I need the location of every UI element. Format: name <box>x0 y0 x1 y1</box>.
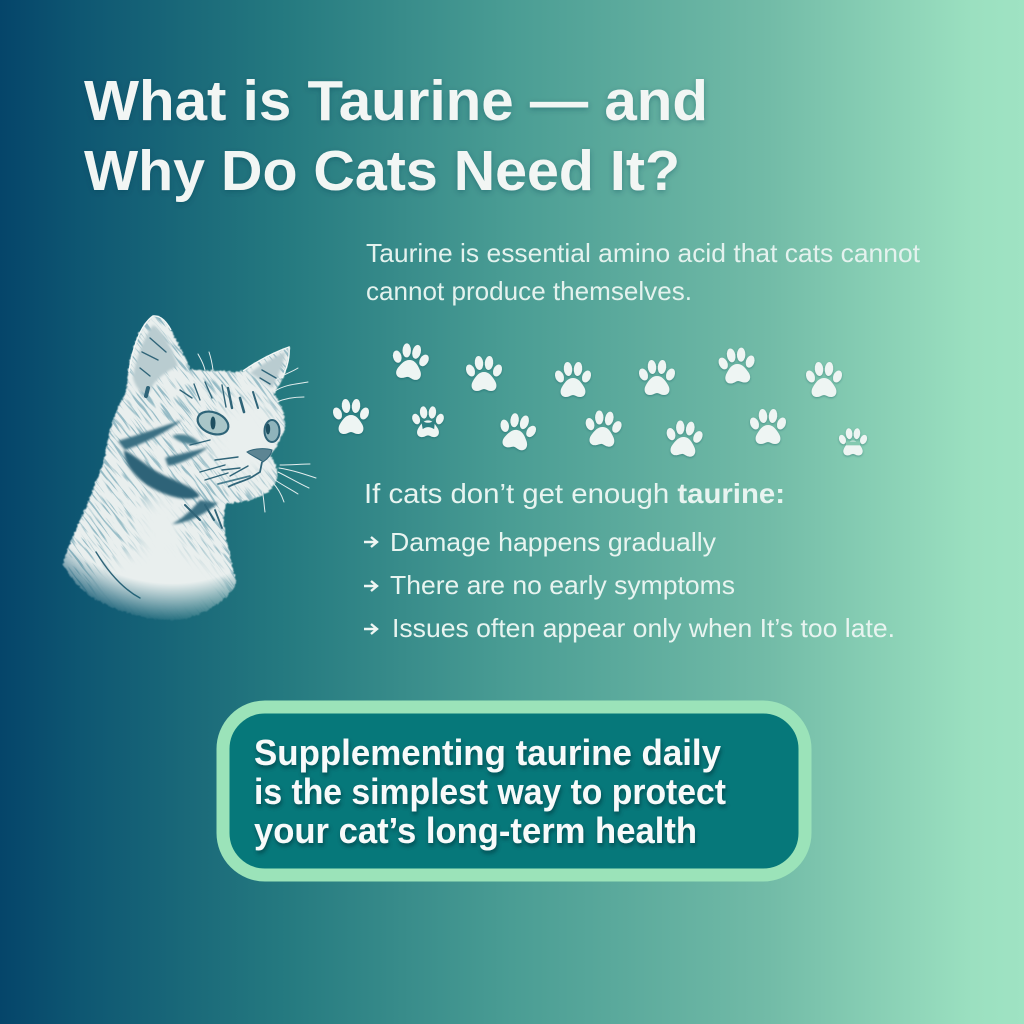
paw 5 <box>716 346 758 384</box>
title: What is Taurine — and <box>84 69 708 133</box>
paw 7 <box>331 399 371 434</box>
item 1: Damage happens gradually <box>390 527 716 557</box>
paw 8 broken <box>411 406 445 437</box>
left eye <box>196 410 230 436</box>
intro text: cannot produce themselves. <box>366 276 692 306</box>
fur strokes <box>96 338 276 598</box>
callout text: is the simplest way to protect <box>254 771 726 812</box>
ear outlines <box>129 316 289 378</box>
intro text: Taurine is essential amino acid that cats cannot <box>366 238 921 268</box>
paw 2 <box>464 356 504 391</box>
paw 1 <box>388 341 432 382</box>
paw 12 <box>748 409 788 444</box>
paw 11 <box>663 419 706 458</box>
paw 9 <box>494 410 540 453</box>
fur texture <box>66 316 288 605</box>
icon: cat portrait <box>62 315 316 620</box>
paw 10 <box>582 409 625 448</box>
callout text <box>254 732 726 851</box>
callout box <box>223 707 805 875</box>
ear inner shading <box>133 325 178 393</box>
whiskers <box>198 352 316 512</box>
title: Why Do Cats Need It? <box>84 139 680 203</box>
paw print trail <box>331 341 868 458</box>
nose and mouth <box>228 449 272 487</box>
callout text: your cat’s long-term health <box>254 810 697 851</box>
list heading: If cats don’t get enough taurine: <box>364 478 785 509</box>
item 3: Issues often appear only when It’s too late. <box>392 613 895 643</box>
intro text <box>366 238 921 306</box>
right eye <box>264 420 280 442</box>
callout <box>223 707 805 875</box>
dark cheek patch <box>124 450 200 499</box>
item 2: There are no early symptoms <box>390 570 735 600</box>
consequences list <box>364 478 895 643</box>
paw 4 <box>637 360 677 395</box>
paw 3 <box>553 362 593 397</box>
callout text: Supplementing taurine daily <box>254 732 721 773</box>
cat silhouette <box>63 316 289 620</box>
title <box>84 69 708 203</box>
paw 13 broken <box>838 428 868 455</box>
paw 6 <box>804 362 844 397</box>
